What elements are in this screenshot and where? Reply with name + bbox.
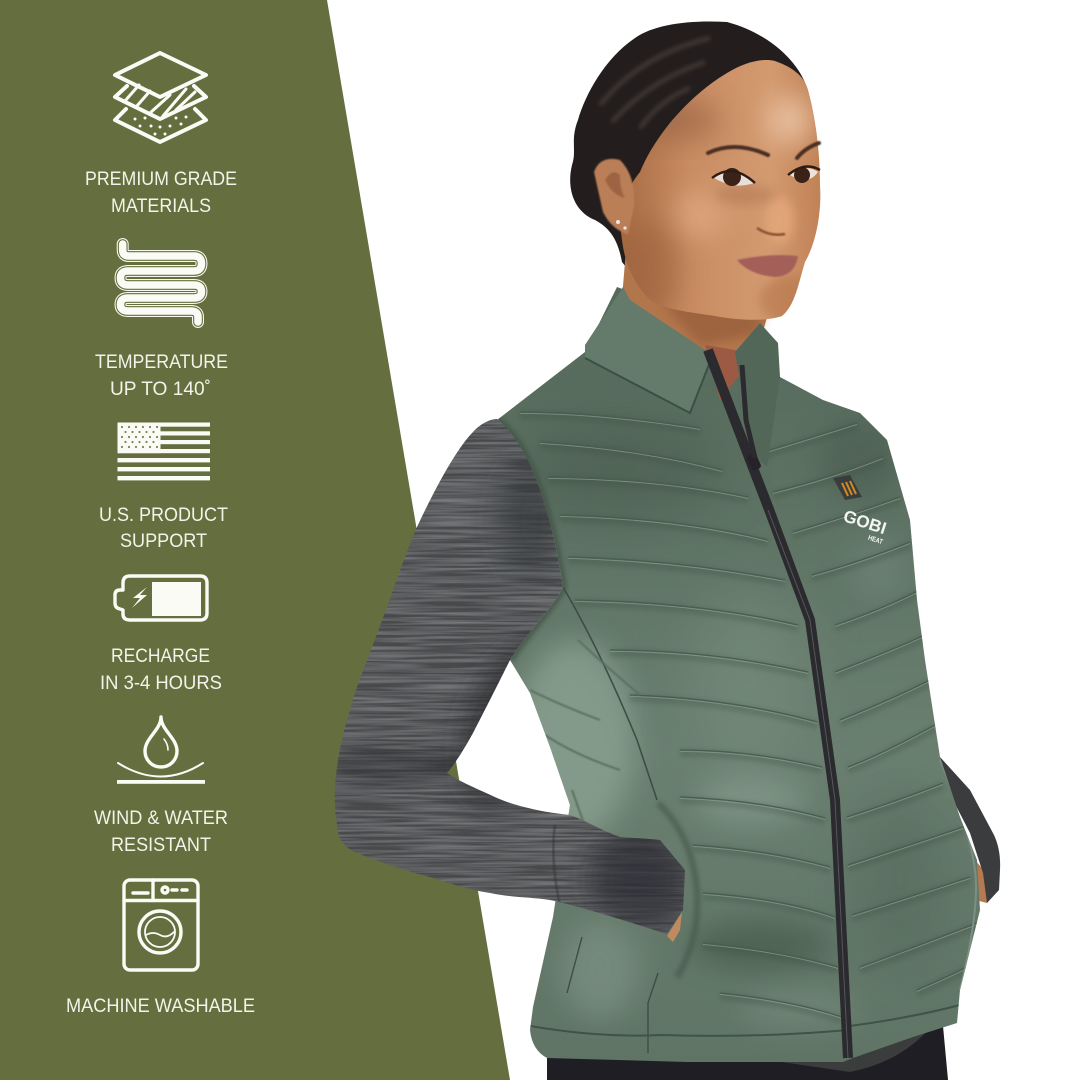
text: wind and water resistant: WIND & WATER [94, 807, 228, 829]
text: us product support [99, 504, 228, 552]
left hand in pocket [667, 912, 682, 942]
photo: woman wearing green heated vest [330, 22, 1000, 1080]
left eye [712, 168, 755, 186]
neck [622, 250, 772, 357]
zipper pull [746, 453, 762, 471]
vest shading [515, 420, 950, 1030]
icon: heating coil tube [120, 244, 202, 322]
right stand collar [735, 323, 780, 467]
text: recharge in 3-4 hours: RECHARGE [111, 645, 210, 667]
text: wind and water resistant: RESISTANT [111, 834, 211, 856]
dark leggings [547, 1026, 948, 1080]
nostril and nose shadow [757, 228, 785, 235]
text: temperature up to 140: UP TO 140˚ [110, 378, 211, 400]
left long sleeve grey arm [330, 415, 690, 940]
hair [570, 22, 808, 272]
text: wind and water resistant [94, 807, 228, 856]
quilting seams [520, 415, 977, 1020]
main zipper [708, 350, 848, 1058]
quilted vest body [490, 280, 990, 1070]
text: machine washable: MACHINE WASHABLE [66, 995, 255, 1017]
side panel seam and pocket lines [563, 587, 657, 800]
undershirt hem [700, 1028, 930, 1072]
icon: washing machine [124, 880, 198, 970]
icon: american flag [118, 422, 210, 480]
text: premium grade materials: MATERIALS [111, 195, 211, 217]
right sleeve behind vest [940, 757, 1000, 903]
earrings [616, 220, 627, 230]
armhole binding shadow [497, 420, 563, 660]
icon: layered materials [115, 53, 206, 142]
text: temperature up to 140 [95, 351, 228, 400]
text: recharge in 3-4 hours: IN 3-4 HOURS [100, 672, 222, 694]
text: temperature up to 140: TEMPERATURE [95, 351, 228, 373]
facial shading [611, 96, 820, 324]
text: premium grade materials [85, 168, 237, 217]
eyebrows [708, 143, 819, 158]
hair highlights [600, 38, 710, 128]
text: us product support: U.S. PRODUCT [99, 504, 228, 526]
lips [737, 255, 798, 277]
ear [594, 159, 634, 234]
hem band [530, 1005, 960, 1036]
text: recharge in 3-4 hours [100, 645, 222, 694]
right hand [975, 860, 988, 903]
right eye [788, 166, 820, 183]
head: face [621, 60, 820, 320]
text: premium grade materials: PREMIUM GRADE [85, 168, 237, 190]
pocket opening shade [658, 803, 697, 977]
vest chest heat button [833, 475, 862, 500]
panel: olive green slanted sidebar [0, 0, 510, 1080]
vest chest logo: GOBI [841, 506, 889, 538]
text: us product support: SUPPORT [120, 530, 207, 552]
icon: water drop on fabric [117, 717, 205, 784]
inner collar zipper [742, 365, 755, 458]
vest chest logo: HEAT [867, 535, 884, 546]
left stand collar [585, 287, 712, 413]
inner collar lining [705, 345, 742, 400]
icon: battery charging [115, 576, 207, 620]
